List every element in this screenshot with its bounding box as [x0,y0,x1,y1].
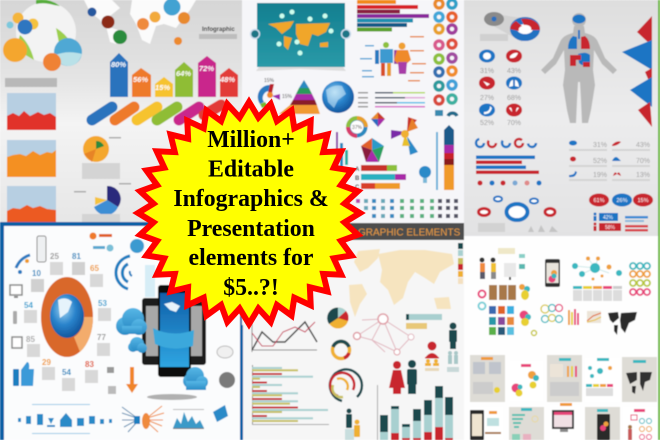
organ stat rows: 31% [593,142,607,149]
world map with bubbles [84,0,196,45]
tag 80%: 80% [111,60,126,69]
pie chart: orange [83,136,121,162]
dark title strip: GRAPHIC ELEMENTS [358,228,461,238]
radial chart with 15%: 15% [264,78,275,84]
tall column chart [436,125,454,190]
donut chart [332,341,350,358]
green edge [658,0,660,236]
numbers and grid blocks: 53 [98,299,107,308]
page four [585,358,620,402]
text block [5,78,57,87]
numbers and grid blocks: 54 [62,368,71,377]
infographic caption: Infographic [202,27,235,33]
pages row two [470,403,657,440]
dark man tall [447,322,459,372]
overlapping circles [520,310,531,326]
square icon [12,337,22,348]
bottom icons row [18,404,112,434]
pictogram rows: A [355,167,360,173]
organ badges with percentages: 52% [480,120,494,127]
thumbs up [13,362,34,386]
teal network [572,256,622,280]
pictogram rows: B [355,176,360,182]
organ badges with percentages [479,50,522,127]
organ badges with percentages: 68% [507,95,521,102]
chat bubble dark [219,372,235,388]
page eight [550,403,580,440]
page six [470,407,503,440]
numbers and grid blocks [24,252,111,391]
mini line chart [587,311,601,323]
orange badges [90,232,114,252]
brown doors [489,285,516,300]
phones with ribbon [142,285,206,377]
user badge [425,342,439,371]
panel: flat elements bottom right [464,236,660,440]
colour header cards [573,286,622,301]
blue arc icon [116,256,132,289]
tag 72%: 72% [199,64,214,73]
cart icon [107,367,114,373]
human body pictograms [360,36,426,82]
page nine [585,407,620,440]
exploded radial chart [391,117,418,155]
radial chart with 15% [258,78,293,108]
cloud icon: bottom [183,367,208,390]
numbers and grid blocks: 25 [50,252,59,261]
page one [470,355,505,402]
badge headline: Million+ [207,127,295,153]
tag 15%: 15% [155,83,170,92]
page two [510,361,543,401]
badge headline: $5..?! [223,275,279,301]
panel: human body infographic top right [464,0,660,236]
organ stat rows: 52% [593,158,607,165]
numbers and grid blocks: 10 [32,269,41,278]
ring cluster [541,304,562,322]
organ badges with percentages: 43% [507,68,521,75]
badge headline: elements for [189,245,314,271]
organs [568,14,590,67]
organ stat rows: 19% [593,172,607,179]
central globe with orange ring [41,277,93,357]
slanted label tags [92,105,221,120]
panel: colourful elements top middle [242,0,464,224]
pie chart [327,307,348,328]
infographic caption [199,27,237,39]
donut grid [630,263,650,295]
organ stat rows: 43% [636,142,650,149]
small dots row [478,180,542,186]
organ stat rows: 70% [636,158,650,165]
bar tags chart [110,53,238,97]
bulb icon [519,284,530,300]
tag 48%: 48% [219,75,235,84]
pictogram rows [406,314,442,329]
donut 37% [348,118,366,136]
organ badges with percentages: 27% [480,95,494,102]
envelope icon [213,405,228,422]
blue sliver at left [240,325,243,440]
handset icon [13,311,17,324]
pie text lines [82,163,120,179]
line chart [252,318,317,352]
gender bars: 42% [603,215,614,221]
pages row one [470,355,657,402]
cloud icon: large [116,308,147,335]
numbers and grid blocks: 65 [90,264,99,273]
horizontal colour bars [357,0,429,32]
head icon with donut [480,12,540,42]
cloud icon: small [128,337,147,353]
orange down arrow [126,367,138,393]
pyramid [279,80,320,114]
cartoon presenters [480,248,525,280]
pie text lines two [82,214,120,223]
small ring [532,330,536,336]
dark title strip [345,223,464,240]
swirl icon [16,255,30,274]
lightbulb [419,166,431,183]
outline phone icon [37,236,46,262]
blue circle near star [130,239,144,253]
badge headline: Presentation [187,216,315,242]
organ badges with percentages: 31% [480,68,494,75]
concentric arc chart [330,369,362,401]
organ stat rows: 13% [636,172,650,179]
vertical mini bars [568,309,579,325]
mind map [122,406,164,432]
icon rows [356,199,458,218]
pictogram rows: C [355,185,360,191]
starburst shape [138,102,360,324]
percent bubbles: 26% [616,198,628,204]
woman and man icons [389,360,417,394]
area chart: orange red [7,186,56,223]
tag 56%: 56% [133,75,148,84]
badge headline [173,127,329,301]
phone shadow [147,394,197,400]
gender bars [594,212,648,232]
pale vertical tag [145,265,155,297]
page seven [509,407,544,440]
page five [622,357,657,402]
panel: blue framed mobile infographic bottom left [0,222,242,440]
organ badges with percentages: 70% [507,120,521,127]
page ten [623,407,657,440]
dark world map [608,312,637,335]
download icon [108,386,116,394]
badge headline: Editable [208,156,294,182]
network diagram [354,314,414,355]
legend swatches [458,243,463,284]
globe with bubbles [3,0,82,71]
numbers and grid blocks: 54 [24,301,33,310]
green edge [658,236,660,440]
starburst badge [138,102,360,324]
page three [547,355,582,402]
gender bars: 58% [605,225,616,231]
donut 37%: 37% [352,125,363,131]
organ ring group [478,196,555,220]
tag 64%: 64% [176,69,191,78]
blue area chart [173,409,204,429]
percent bubbles: 15% [637,198,649,204]
donut columns [435,0,457,116]
spike chart [336,132,348,168]
numbers and grid blocks: 29 [42,358,51,367]
grey blocks [478,223,558,232]
area chart: red [7,93,56,130]
pentagon [361,138,384,162]
horizontal bars [476,156,539,174]
diamond [371,112,385,127]
numbers and grid blocks: 83 [85,360,94,369]
panel: grey infographic top left [0,0,242,224]
percent bubbles [589,194,653,206]
panel: muted colour elements bottom middle [240,223,464,440]
horizontal bar chart [252,365,329,425]
pictogram rows [355,165,406,191]
organ stat rows [569,140,650,181]
numbers and grid blocks: 81 [72,252,81,261]
social tile grid [489,306,514,335]
people pillar [345,408,360,440]
smartphone [545,259,560,287]
numbers and grid blocks: 85 [26,335,35,344]
human body figure [541,13,617,123]
tan world map [349,249,454,317]
percent progress lines [358,92,425,108]
badge headline: Infographics & [173,186,329,212]
percent bubbles: 61% [593,198,605,204]
monitor icon [10,285,22,298]
decorative triangles [622,16,652,127]
blue globe [322,81,354,113]
pie chart: blue [74,183,131,215]
rings left [478,290,486,310]
chat bubble light [217,346,233,358]
area chart: orange [7,140,56,177]
radial chart with 15%: 15% [282,94,293,100]
column chart [377,385,453,440]
numbers and grid blocks: 77 [97,333,106,342]
teal world board [250,3,350,71]
ring gauges [476,139,536,147]
